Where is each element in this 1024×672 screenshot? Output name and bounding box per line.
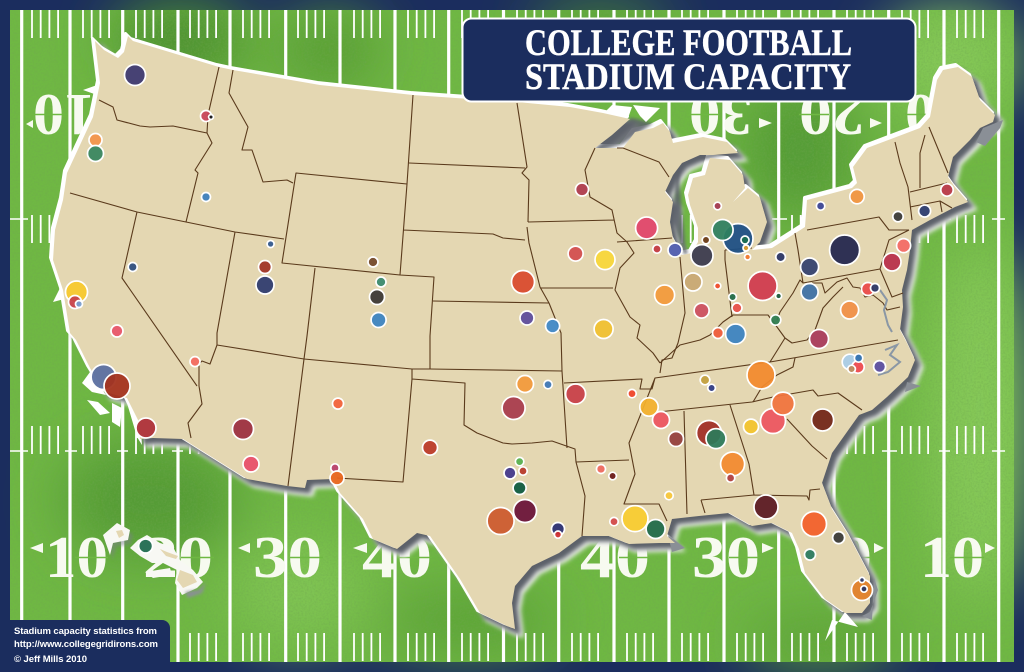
Hawaiian islands [116, 530, 197, 588]
title text: COLLEGE FOOTBALL [525, 23, 852, 64]
yard numbers top (inverted): 20 [799, 82, 865, 148]
yard numbers bottom: 30 [253, 524, 322, 590]
credits text: Stadium capacity statistics from [14, 626, 157, 637]
state borders [70, 67, 952, 536]
stadium markers [66, 64, 953, 600]
Hawaii inset [103, 523, 206, 598]
yard numbers bottom [30, 524, 995, 590]
markers: northeast [801, 184, 953, 348]
markers: southwest [66, 281, 344, 553]
Great Lakes shading [596, 120, 725, 254]
markers: southeast [596, 354, 886, 600]
yard numbers bottom: 20 [805, 524, 872, 590]
yard numbers top (inverted): 10 [33, 82, 95, 148]
yard numbers top (inverted) [26, 82, 967, 148]
yard numbers bottom: 20 [143, 524, 213, 590]
yard numbers top (inverted): 30 [689, 82, 752, 148]
credits text: http://www.collegegridirons.com [14, 639, 158, 650]
credits panel [10, 620, 170, 672]
credits text: © Jeff Mills 2010 [14, 654, 87, 665]
markers: northwest [88, 64, 386, 328]
title text: STADIUM CAPACITY [525, 57, 851, 98]
coastal spikes [53, 41, 858, 641]
title panel [462, 18, 916, 102]
markers: midwest [653, 202, 785, 344]
yard numbers bottom: 10 [45, 524, 108, 590]
markers: plains and Texas [422, 183, 658, 538]
bays and sounds [878, 290, 900, 375]
credits text [14, 626, 158, 665]
yard numbers bottom: 30 [692, 524, 760, 590]
yard numbers bottom: 40 [580, 524, 650, 590]
title text [525, 23, 852, 98]
yard numbers bottom: 10 [920, 524, 984, 590]
yard numbers top (inverted): 10 [905, 82, 967, 148]
yard numbers bottom: 40 [362, 524, 432, 590]
